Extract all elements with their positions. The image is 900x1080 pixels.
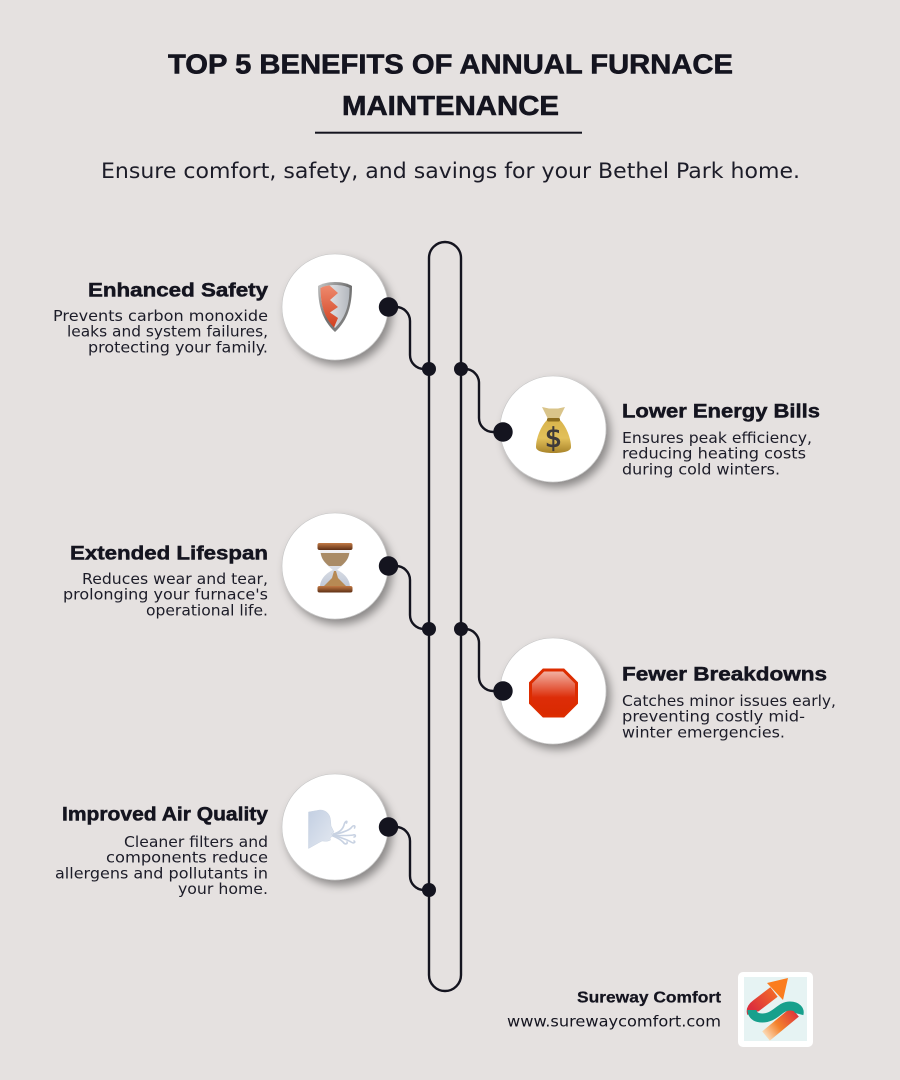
description xyxy=(622,693,836,741)
timeline spine xyxy=(429,242,461,991)
heading: Extended Lifespan xyxy=(70,542,268,564)
title xyxy=(168,48,733,121)
icon: stop sign xyxy=(530,670,576,716)
description: Prevents carbon monoxide xyxy=(53,308,268,325)
logo tail xyxy=(766,1012,795,1036)
icon circle: lifespan xyxy=(282,513,388,619)
description: winter emergencies. xyxy=(622,724,785,741)
icon circle: energy xyxy=(500,376,606,482)
description: Cleaner filters and xyxy=(124,834,268,851)
description: leaks and system failures, xyxy=(67,324,268,341)
footer brand: Sureway Comfort xyxy=(577,989,722,1006)
description: protecting your family. xyxy=(88,339,268,356)
description xyxy=(55,834,268,898)
icon: blowing face xyxy=(308,810,355,848)
connector: air quality xyxy=(379,817,436,897)
description: during cold winters. xyxy=(622,461,780,478)
panel: Extended Lifespan xyxy=(63,513,436,636)
description: your home. xyxy=(178,881,268,898)
icon circle: breakdowns xyxy=(500,638,606,744)
icon: hourglass xyxy=(318,543,352,592)
icon: shield xyxy=(318,282,352,332)
logo arrow xyxy=(753,978,788,1013)
icon circle: safety xyxy=(282,254,388,360)
footer brand xyxy=(507,989,722,1031)
connector: lifespan xyxy=(379,556,436,636)
footer brand: www.surewaycomfort.com xyxy=(507,1013,721,1031)
icon circle: air quality xyxy=(282,774,388,880)
heading: Enhanced Safety xyxy=(88,279,268,301)
title: MAINTENANCE xyxy=(342,90,559,121)
icon: money bag xyxy=(536,407,571,454)
logo xyxy=(738,972,813,1047)
description: Reduces wear and tear, xyxy=(82,571,268,588)
icon: money bag: $ xyxy=(545,423,562,454)
description xyxy=(622,430,812,478)
heading: Fewer Breakdowns xyxy=(622,664,827,686)
connector: safety xyxy=(379,297,436,376)
description: prolonging your furnace's xyxy=(63,587,268,604)
panel: Lower Energy Bills xyxy=(454,362,820,482)
description xyxy=(63,571,268,619)
heading: Lower Energy Bills xyxy=(622,400,820,422)
connector: breakdowns xyxy=(454,622,513,701)
description: Catches minor issues early, xyxy=(622,693,836,710)
description xyxy=(53,308,268,356)
description: operational life. xyxy=(146,602,268,619)
description: components reduce xyxy=(106,850,268,867)
panel: Enhanced Safety xyxy=(53,254,436,376)
description: Ensures peak efficiency, xyxy=(622,430,812,447)
panel: Improved Air Quality xyxy=(55,774,436,898)
panel: Fewer Breakdowns xyxy=(454,622,836,744)
title: TOP 5 BENEFITS OF ANNUAL FURNACE xyxy=(168,48,733,79)
description: preventing costly mid- xyxy=(622,709,805,726)
description: reducing heating costs xyxy=(622,446,806,463)
logo teal band xyxy=(752,1006,799,1018)
connector: energy xyxy=(454,362,513,442)
subtitle: Ensure comfort, safety, and savings for your Bethel Park home. xyxy=(101,159,800,183)
description: allergens and pollutants in xyxy=(55,865,268,882)
heading: Improved Air Quality xyxy=(62,804,268,826)
